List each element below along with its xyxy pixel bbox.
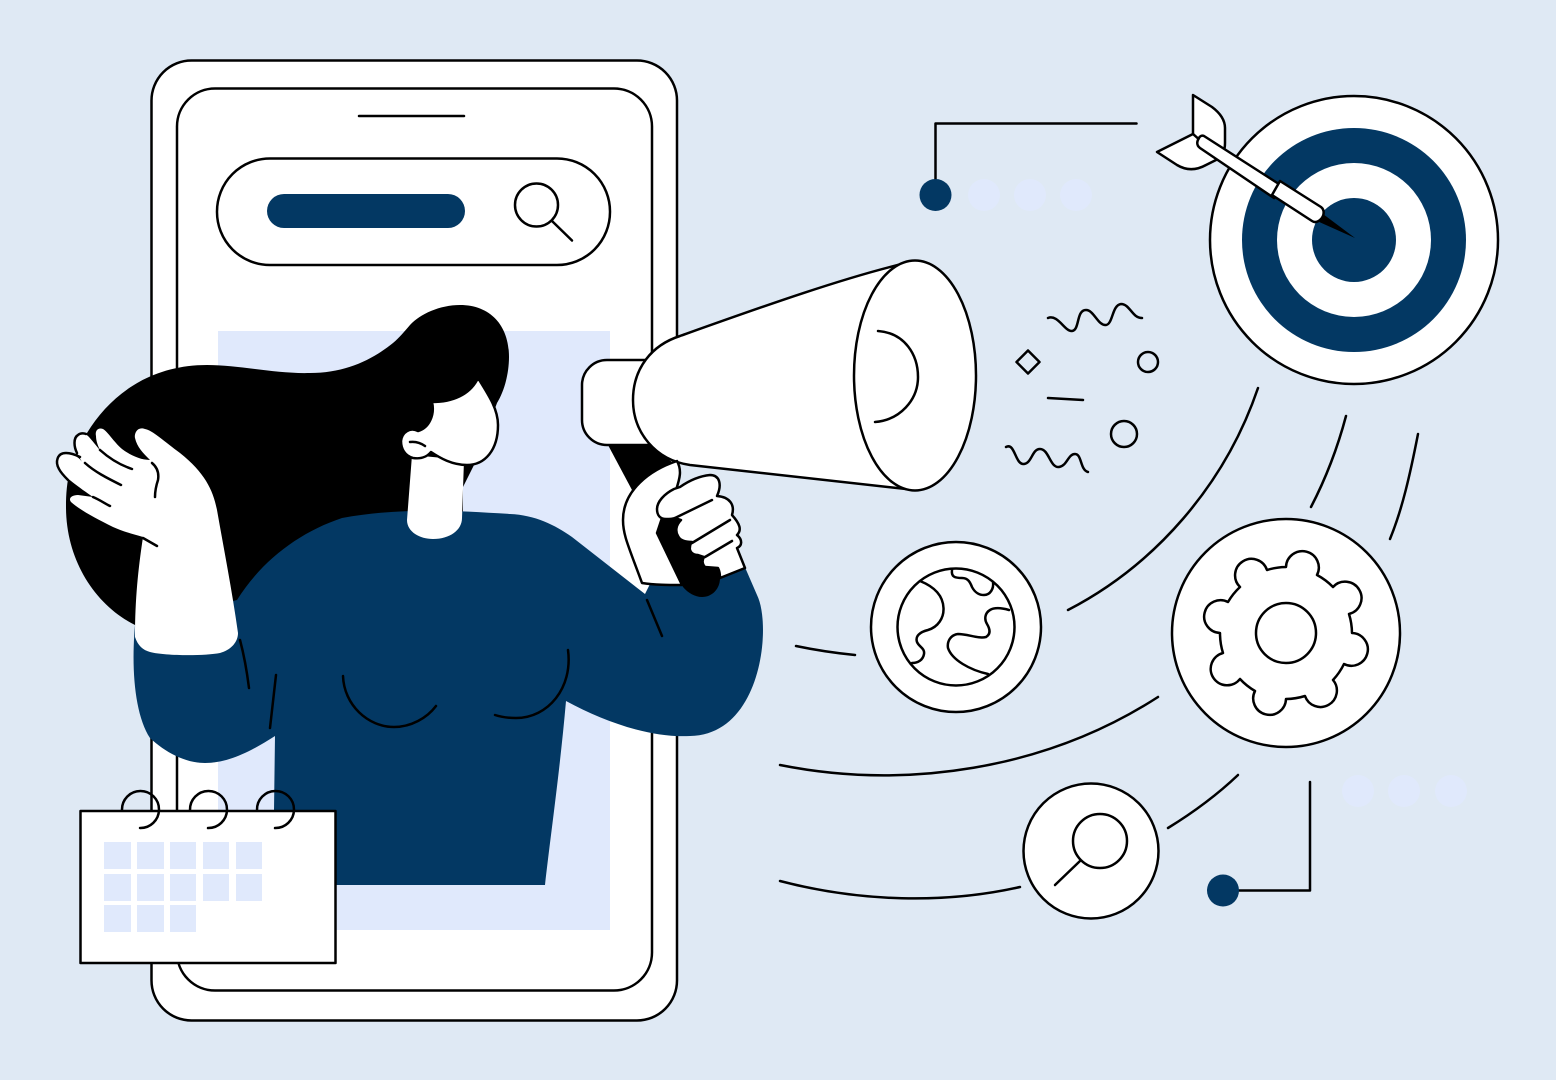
- woman neck: [407, 455, 464, 539]
- calendar: [80, 791, 336, 963]
- smartphone: [152, 60, 677, 1020]
- left hand raised: [57, 428, 238, 655]
- confetti decoration: [1006, 304, 1158, 472]
- megaphone: [582, 260, 976, 490]
- woman face: [401, 378, 498, 465]
- bottom connector with dots: [1207, 775, 1467, 906]
- woman sweater: [134, 511, 763, 885]
- gear icon: [1172, 519, 1400, 747]
- woman hair: [66, 305, 509, 625]
- sweater fold lines: [240, 600, 662, 728]
- dart: [1157, 95, 1355, 238]
- globe icon: [871, 542, 1041, 712]
- sound wave arcs: [780, 388, 1418, 898]
- target: [1210, 96, 1498, 384]
- right arm gripping hand: [623, 461, 745, 585]
- magnifier icon: [1024, 784, 1158, 918]
- top connector with dots: [920, 124, 1136, 211]
- search bar: [217, 158, 610, 265]
- megaphone handle: [608, 443, 720, 597]
